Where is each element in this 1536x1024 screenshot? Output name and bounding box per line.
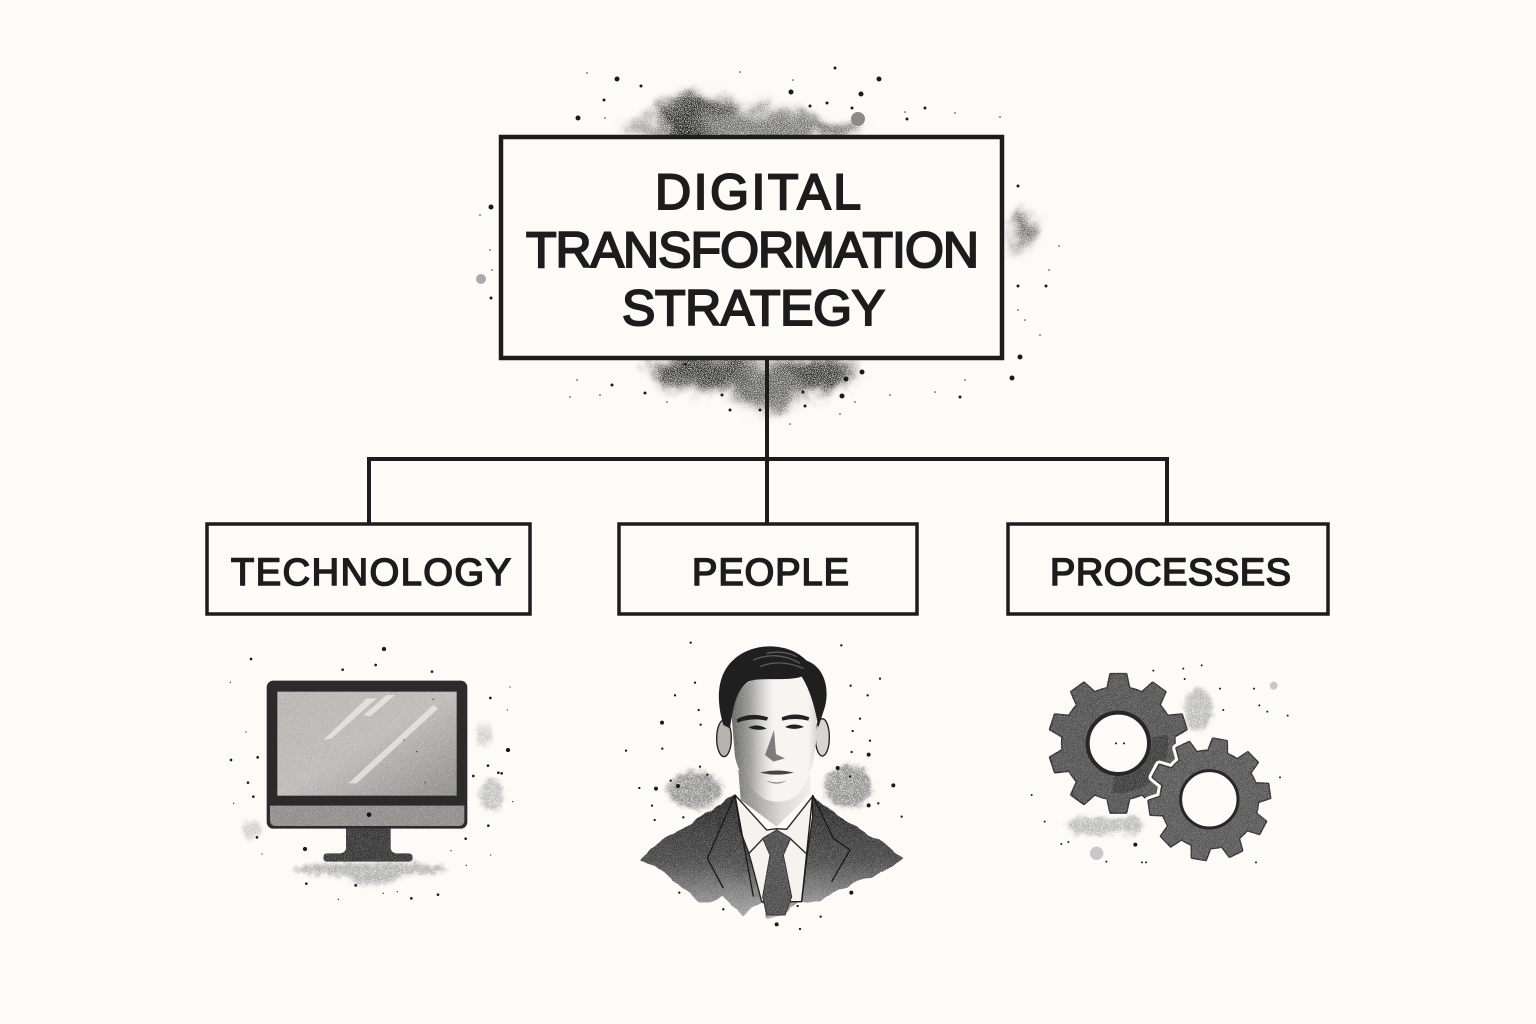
suit jacket (640, 793, 903, 917)
monitor stand (323, 825, 413, 862)
icon: interlocking gears (1032, 665, 1288, 862)
eyebrows and eyes (737, 714, 809, 730)
small gear (1148, 738, 1270, 860)
monitor chin (270, 806, 464, 826)
necktie (763, 830, 792, 915)
large gear (1049, 674, 1187, 812)
title text (526, 164, 979, 336)
face (732, 677, 817, 802)
collar lines (748, 838, 806, 854)
title text: DIGITAL (655, 164, 861, 220)
hair highlights (753, 652, 803, 668)
hair (719, 646, 827, 728)
shirt and collar (735, 795, 813, 902)
white hole in large gear (1088, 713, 1149, 774)
gap around small gear (1148, 738, 1270, 860)
box: processes: PROCESSES (1050, 552, 1291, 594)
main title box (501, 137, 1002, 358)
box: people: PEOPLE (692, 552, 849, 594)
ears (717, 719, 829, 757)
face shading (732, 677, 817, 802)
screen reflections (323, 695, 438, 783)
lapel lines (707, 795, 850, 902)
box: processes (1008, 524, 1328, 614)
monitor body (267, 681, 467, 829)
neck (738, 770, 811, 827)
title text: TRANSFORMATION (526, 222, 979, 278)
nose shadow (765, 730, 785, 762)
box: technology: TECHNOLOGY (231, 552, 511, 594)
title text: STRATEGY (622, 280, 885, 336)
mouth (760, 770, 794, 775)
box: technology (207, 524, 530, 614)
icon: businessman portrait (626, 643, 903, 929)
ink splatter around main title box (476, 68, 1059, 424)
white hole in small gear (1181, 771, 1238, 828)
monitor screen (277, 692, 457, 796)
connector lines (369, 358, 1167, 523)
icon: computer monitor (230, 649, 513, 899)
box: people (619, 524, 917, 614)
